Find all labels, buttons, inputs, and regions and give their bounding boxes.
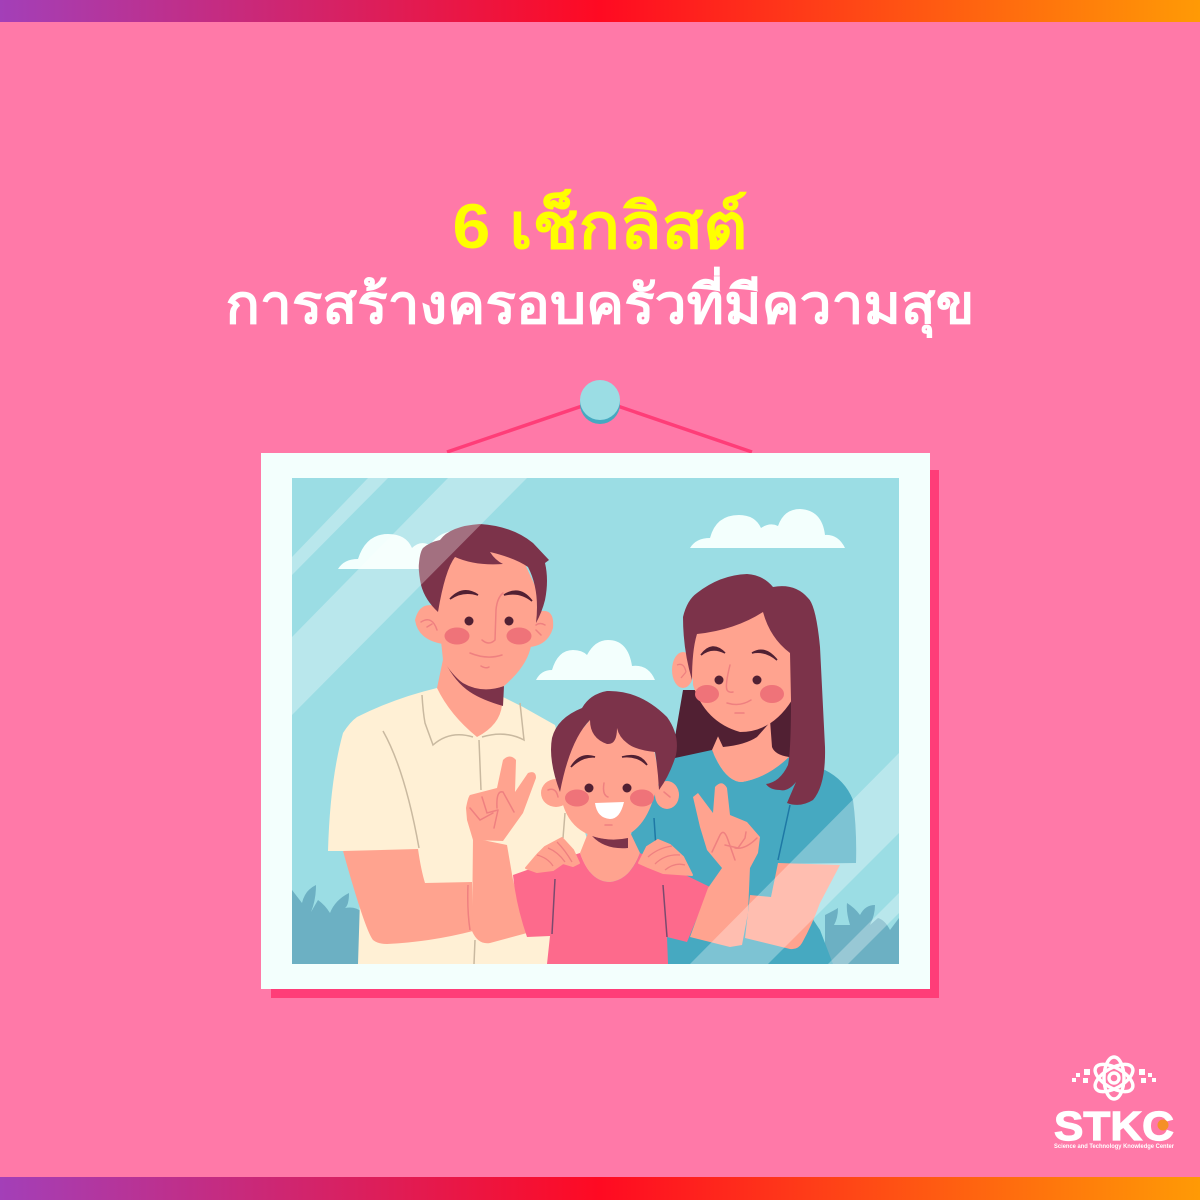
hand peace left (466, 756, 536, 841)
child facial features (548, 756, 670, 825)
child neck (580, 828, 640, 882)
man forearm (472, 838, 527, 943)
child neck shadow (592, 836, 628, 848)
bush right (825, 903, 899, 964)
family illustration (292, 478, 899, 964)
man neck shadow (447, 666, 504, 706)
picture frame shadow (271, 470, 939, 998)
icon: atom (1091, 1057, 1137, 1099)
picture frame (261, 453, 930, 989)
cloud left (338, 531, 450, 569)
cloud centre (536, 640, 655, 680)
man hair (419, 524, 549, 623)
woman neck (712, 720, 789, 782)
man shirt (328, 688, 590, 964)
sky (292, 478, 899, 964)
glass glare (292, 478, 899, 964)
woman neck shadow (714, 718, 768, 747)
child figure (466, 691, 760, 964)
hand peace right (693, 783, 760, 868)
child shirt (513, 853, 710, 964)
bush left (292, 885, 362, 964)
top gradient bar (0, 0, 1200, 22)
man's hand on shoulder (526, 838, 579, 872)
STKC logo (1054, 1057, 1175, 1150)
logo wordmark: STKC (1054, 1103, 1174, 1149)
child shirt seams (552, 879, 667, 937)
title line 1: yellow heading: 6 เช็กลิสต์ (452, 188, 748, 262)
man ears (415, 605, 553, 647)
woman ear (672, 652, 694, 688)
title (226, 188, 974, 339)
man arm (343, 849, 473, 944)
woman shirt (628, 750, 856, 964)
man figure (328, 524, 590, 964)
man neck (437, 660, 503, 737)
woman figure (628, 574, 856, 964)
child ears (541, 779, 563, 807)
woman face (692, 612, 791, 732)
bottom gradient bar (0, 1177, 1200, 1200)
hanging string (447, 400, 752, 452)
woman arm (745, 863, 840, 949)
woman's hand on shoulder (639, 840, 692, 875)
woman facial features (695, 647, 784, 713)
child face (560, 720, 660, 839)
woman shirt seam (654, 805, 790, 860)
woman hair (683, 574, 825, 805)
man shirt seams (383, 695, 565, 964)
child hair (551, 691, 677, 792)
man facial features (421, 591, 545, 668)
logo tagline: Science and Technology Knowledge Center (1054, 1144, 1175, 1150)
logo orange dot (1158, 1120, 1168, 1130)
cloud right (690, 509, 845, 548)
woman back hair (675, 690, 791, 761)
title line 2: white subheading: การสร้างครอบครัวที่มีความสุข (226, 266, 974, 339)
icon: pin (580, 380, 620, 424)
man face (432, 550, 537, 689)
logo dots (1072, 1069, 1156, 1083)
child right forearm (690, 867, 750, 947)
